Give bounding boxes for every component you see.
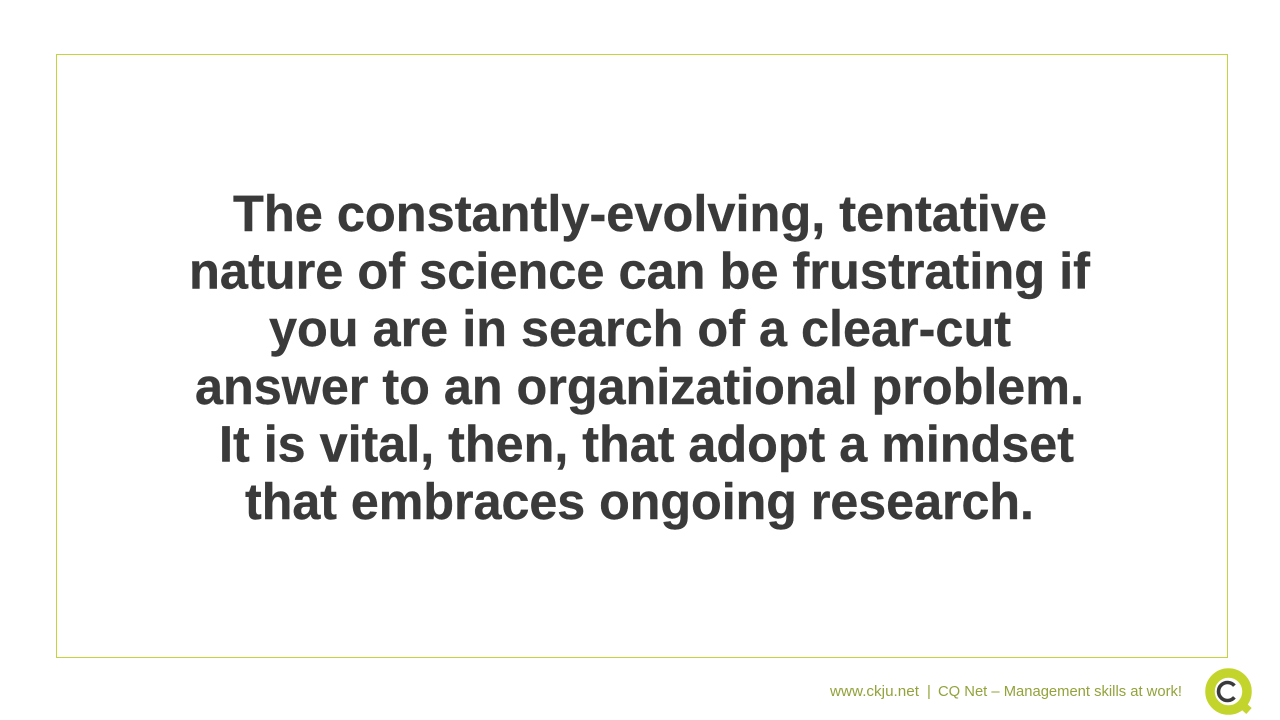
quote text: nature of science can be frustrating if xyxy=(189,242,1091,300)
quote text: The constantly-evolving, tentative xyxy=(233,185,1047,242)
footer text: | xyxy=(927,683,931,700)
footer text: www.ckju.net xyxy=(829,683,920,700)
quote text: you are in search of a clear-cut xyxy=(269,300,1011,357)
quote text: It is vital, then, that adopt a mindset xyxy=(219,416,1074,472)
footer text: CQ Net – Management skills at work! xyxy=(938,683,1182,700)
quote text xyxy=(189,185,1091,530)
footer text xyxy=(829,683,1182,700)
quote text: answer to an organizational problem. xyxy=(195,358,1084,415)
quote text: that embraces ongoing research. xyxy=(245,473,1034,530)
panel: quote frame xyxy=(56,54,1228,658)
icon: CQ logo xyxy=(1210,673,1249,711)
